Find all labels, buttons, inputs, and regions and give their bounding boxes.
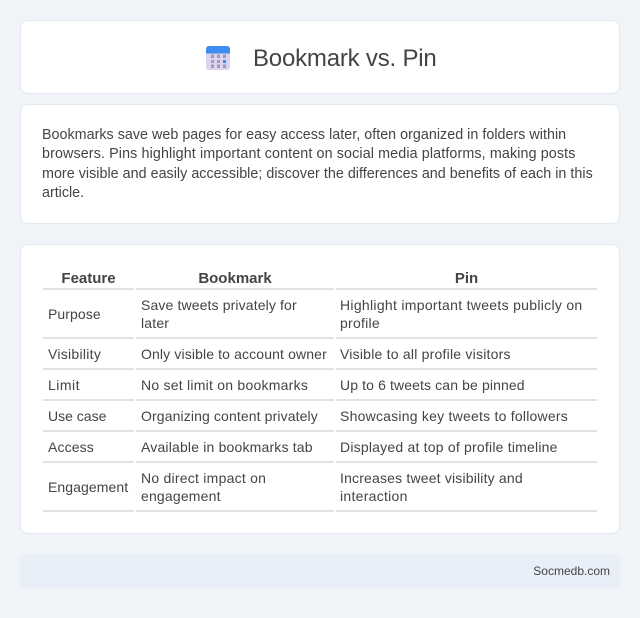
title text: Bookmark vs. Pin — [253, 45, 437, 72]
row: use case: Organizing content privately — [141, 408, 318, 424]
row: engagement: engagement — [141, 488, 221, 504]
icon: calendar — [206, 46, 230, 70]
intro text: more visible and easily accessible; discover the differences and benefits of each in this — [42, 166, 593, 182]
row: purpose — [48, 297, 583, 331]
row: limit: Up to 6 tweets can be pinned — [340, 377, 525, 393]
row: visibility: Only visible to account owner — [141, 346, 327, 362]
panel: title — [20, 20, 620, 94]
row: access: Available in bookmarks tab — [141, 439, 313, 455]
row: limit: No set limit on bookmarks — [141, 377, 308, 393]
table header: Feature — [61, 270, 116, 286]
row: access — [48, 439, 558, 455]
row: engagement — [48, 470, 523, 504]
row: purpose: Save tweets privately for — [141, 297, 297, 313]
row: visibility: Visible to all profile visitors — [340, 346, 511, 362]
intro text — [42, 127, 593, 201]
row: access: Displayed at top of profile timeline — [340, 439, 558, 455]
panel: comparison table — [20, 244, 620, 534]
intro text: article. — [42, 185, 84, 201]
table header — [61, 270, 478, 286]
row: engagement: No direct impact on — [141, 470, 266, 486]
panel: intro — [20, 104, 620, 224]
table header: Pin — [455, 270, 478, 286]
row: use case: Showcasing key tweets to followers — [340, 408, 568, 424]
row: purpose: Highlight important tweets publicly on — [340, 297, 583, 313]
row: visibility: Visibility — [48, 346, 101, 362]
footer bar — [20, 554, 620, 588]
row: purpose: profile — [340, 315, 380, 331]
row: engagement: Increases tweet visibility and — [340, 470, 523, 486]
row: engagement: interaction — [340, 488, 408, 504]
row: limit — [48, 377, 525, 393]
intro text: Bookmarks save web pages for easy access later, often organized in folders within — [42, 127, 566, 143]
row: access: Access — [48, 439, 94, 455]
footer text: Socmedb.com — [533, 564, 610, 578]
table header: Bookmark — [198, 270, 272, 286]
row: purpose: Purpose — [48, 306, 101, 322]
intro text: browsers. Pins highlight important content on social media platforms, making posts — [42, 146, 576, 162]
row: purpose: later — [141, 315, 169, 331]
row: engagement: Engagement — [48, 479, 128, 495]
row: limit: Limit — [48, 377, 80, 393]
row: use case — [48, 408, 568, 424]
row: visibility — [48, 346, 511, 362]
row: use case: Use case — [48, 408, 106, 424]
